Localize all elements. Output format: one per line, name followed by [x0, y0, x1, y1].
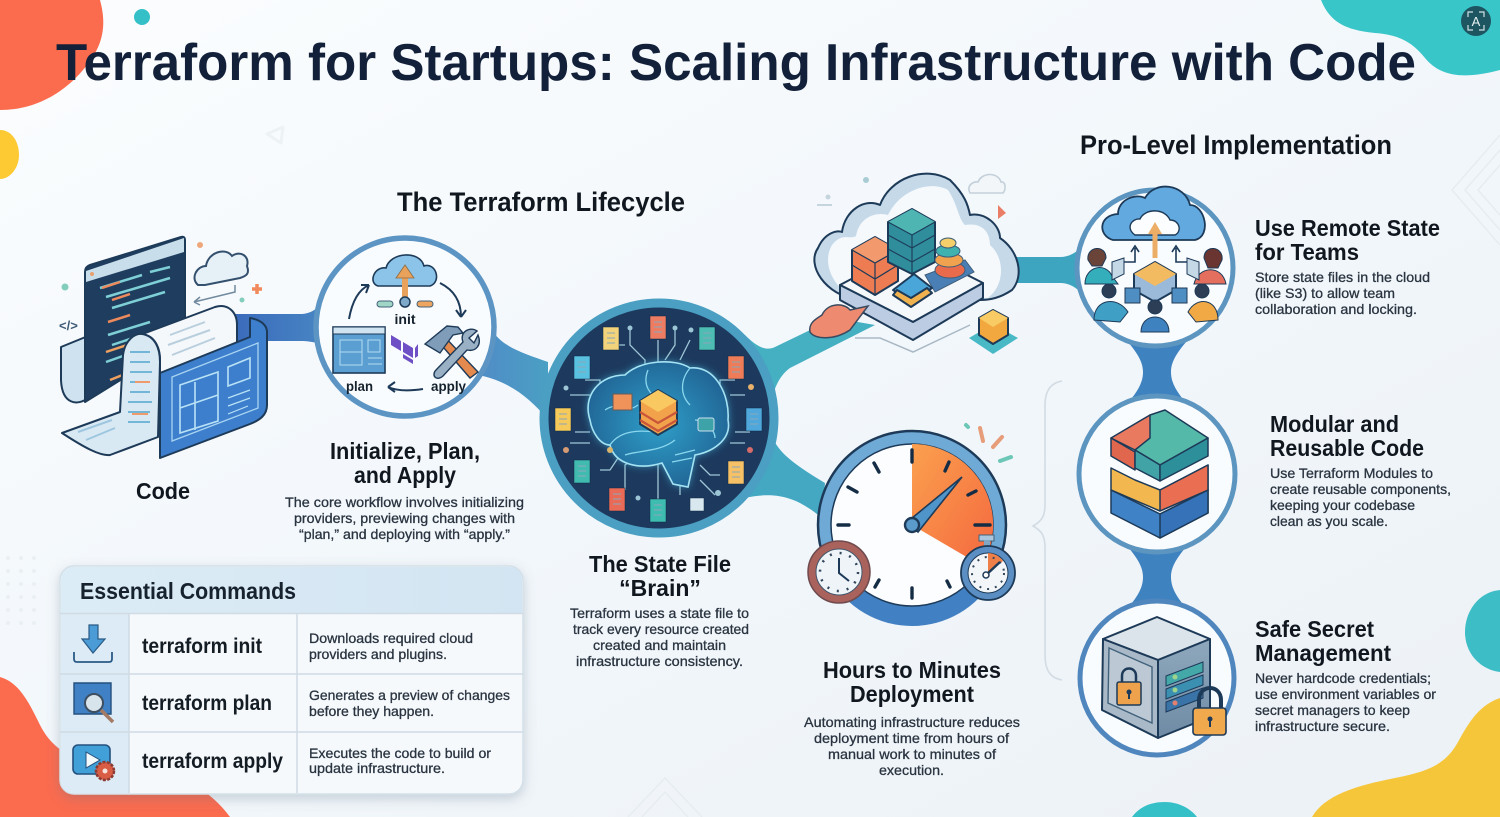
text: initialize plan apply: Initialize, Plan,	[330, 438, 480, 464]
text: hours to minutes: Automating infrastructure reduces	[804, 714, 1020, 730]
text: modular code: Reusable Code	[1270, 435, 1424, 461]
icon: padlock	[1193, 688, 1226, 735]
icon: scroll of code	[62, 306, 237, 455]
text: secret management: Never hardcode credentials;	[1255, 670, 1431, 686]
label: plan: plan	[346, 378, 373, 394]
icon: puzzle stack	[1111, 410, 1208, 538]
panel: essential commands	[60, 566, 523, 794]
text: remote state: (like S3) to allow team	[1255, 285, 1395, 301]
text: hours to minutes: Deployment	[850, 681, 974, 707]
circuit lines	[570, 328, 750, 500]
row: terraform apply: update infrastructure.	[309, 760, 445, 776]
row: terraform plan: terraform plan	[142, 692, 272, 715]
icon: gold cube	[969, 310, 1018, 354]
row: terraform apply	[73, 745, 491, 780]
icon: terraform logo	[391, 335, 418, 364]
heading: pro-level implementation: Pro-Level Implementation	[1080, 130, 1392, 160]
panel: remote state circle	[1077, 187, 1233, 346]
text: secret management: Management	[1255, 640, 1391, 666]
label: Code: Code	[136, 478, 190, 504]
row: terraform plan: Generates a preview of changes	[309, 687, 510, 703]
text: modular code: keeping your codebase	[1270, 497, 1415, 513]
text: secret management: Safe Secret	[1255, 616, 1374, 642]
text: hours to minutes: Hours to Minutes	[823, 657, 1001, 683]
text: remote state: collaboration and locking.	[1255, 301, 1417, 317]
icon: platform	[840, 247, 983, 322]
icon: blueprint	[160, 318, 267, 458]
row: terraform apply: terraform apply	[142, 750, 283, 773]
text: secret management: use environment variables or	[1255, 686, 1436, 702]
arrows: team sync	[1122, 246, 1190, 262]
text: initialize plan apply: providers, previewing changes with	[294, 510, 515, 526]
bracket	[1033, 381, 1062, 680]
text: state file: Terraform uses a state file to	[570, 605, 749, 621]
label: apply: apply	[431, 378, 466, 394]
icon: code editor window	[85, 237, 185, 402]
text: state file: track every resource created	[573, 621, 749, 637]
chart: orange sector	[912, 444, 993, 566]
label: init: init	[394, 311, 416, 327]
text: initialize plan apply: and Apply	[354, 462, 456, 488]
heading: essential commands: Essential Commands	[80, 578, 296, 604]
connector flow	[232, 240, 1192, 615]
icon: small cloud	[194, 251, 248, 285]
illustration: speedometer clock	[808, 425, 1015, 626]
icon: state box	[1134, 262, 1176, 302]
icon: cloud	[814, 174, 1019, 300]
row: terraform plan: before they happen.	[309, 703, 434, 719]
icon: file nodes	[555, 316, 762, 522]
text: modular code: clean as you scale.	[1270, 513, 1388, 529]
text: state file: infrastructure consistency.	[576, 653, 743, 669]
icon: stopwatch	[961, 535, 1015, 600]
row: terraform init: Downloads required cloud	[309, 630, 473, 646]
icon: init cloud	[373, 255, 437, 307]
icon: pale cloud	[969, 174, 1005, 193]
arrows: cycle	[349, 283, 466, 392]
illustration: code documents	[59, 237, 267, 458]
icon: hammer and wrench	[425, 326, 479, 378]
text: secret management: secret managers to keep	[1255, 702, 1410, 718]
row: terraform init: terraform init	[142, 635, 262, 658]
text: modular code: Modular and	[1270, 411, 1399, 437]
text: hours to minutes	[804, 657, 1020, 778]
row: terraform init: providers and plugins.	[309, 646, 447, 662]
text: remote state	[1255, 215, 1440, 317]
panel: secret management circle	[1080, 601, 1234, 755]
illustration: code documents: </>	[59, 318, 78, 333]
text: initialize plan apply: “plan,” and deploying with “apply.”	[299, 526, 510, 542]
text: modular code: create reusable components,	[1270, 481, 1451, 497]
text: remote state: for Teams	[1255, 239, 1359, 265]
text: initialize plan apply: The core workflow involves initializing	[285, 494, 524, 510]
translate icon: A	[1472, 14, 1481, 29]
icon: left paper curl	[61, 336, 88, 402]
heading: The Terraform Lifecycle: The Terraform Lifecycle	[397, 187, 685, 217]
row: terraform apply: Executes the code to build or	[309, 745, 491, 761]
icon: glowing brain	[588, 362, 729, 487]
text: remote state: Store state files in the cloud	[1255, 269, 1430, 285]
text: secret management: infrastructure secure.	[1255, 718, 1390, 734]
text: modular code	[1270, 411, 1451, 529]
icon: needle	[905, 477, 962, 532]
row: terraform plan	[74, 683, 510, 722]
icon: cloud upload	[1102, 187, 1205, 258]
icon: speed marks	[980, 428, 1002, 447]
text: remote state: Use Remote State	[1255, 215, 1440, 241]
panel: modular code circle	[1079, 396, 1235, 552]
panel: lifecycle circle	[316, 238, 494, 416]
text: hours to minutes: execution.	[879, 762, 944, 778]
panel: state file brain	[544, 303, 774, 533]
icon: plan window	[333, 327, 385, 373]
text: modular code: Use Terraform Modules to	[1270, 465, 1433, 481]
text: hours to minutes: deployment time from hours of	[814, 730, 1009, 746]
row: terraform init	[74, 625, 473, 662]
text: state file	[570, 551, 749, 669]
text: state file: created and maintain	[593, 637, 726, 653]
icons: team members	[1085, 248, 1226, 332]
icon: stacked layers	[640, 390, 677, 435]
icon: orange small cloud	[810, 305, 868, 338]
text: hours to minutes: manual work to minutes of	[828, 746, 996, 762]
title: Terraform for Startups: Scaling Infrastructure with Code	[56, 34, 1416, 92]
text: state file: The State File	[589, 551, 731, 577]
translate icon	[1461, 6, 1491, 36]
text: initialize plan apply	[285, 438, 524, 542]
text: state file: “Brain”	[619, 575, 701, 601]
icon: orange server	[852, 237, 898, 295]
icon: small clock	[808, 541, 870, 603]
icon: teal server	[888, 209, 935, 274]
icon: layered stack	[925, 238, 974, 292]
icon: vault	[1102, 617, 1210, 738]
text: secret management	[1255, 616, 1436, 734]
illustration: cloud infrastructure	[810, 174, 1019, 354]
